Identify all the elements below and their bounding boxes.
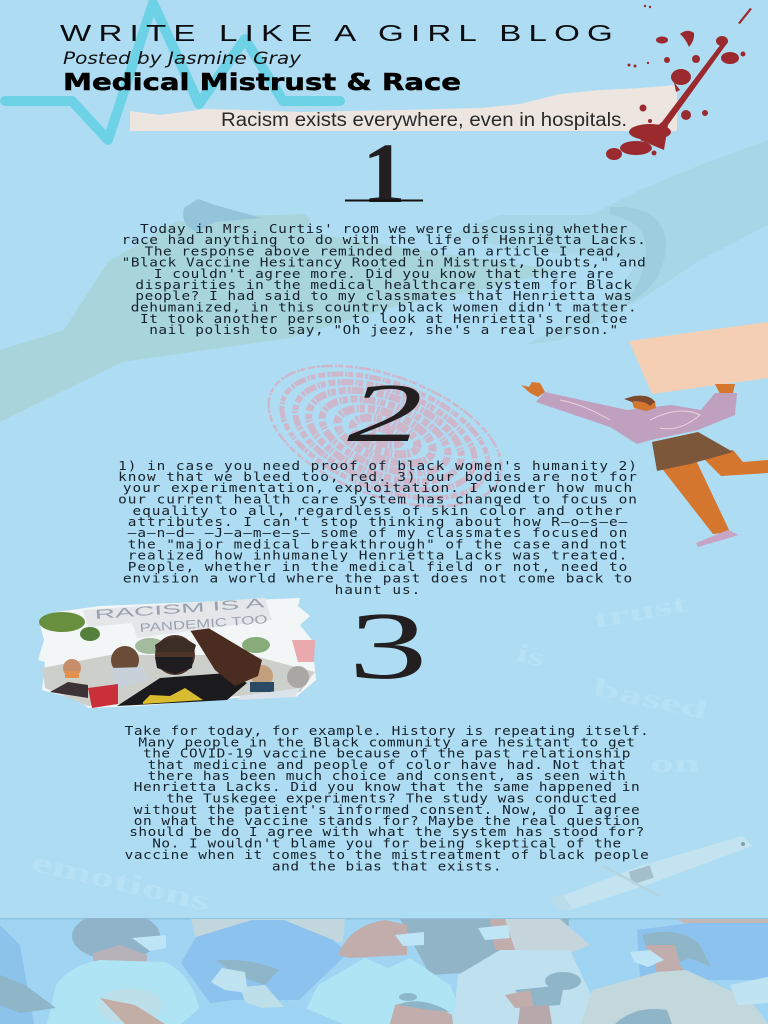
shoe bbox=[696, 530, 739, 547]
raised right hand bbox=[715, 384, 735, 394]
number 2: 2 bbox=[347, 367, 423, 460]
paragraph 3: Take for today, for example. History is repeating itself. bbox=[125, 725, 649, 739]
paragraph 2: haunt us. bbox=[335, 584, 421, 598]
crowd illustration banner bbox=[0, 912, 768, 1024]
main protester bbox=[117, 626, 262, 706]
crowd and background bbox=[42, 655, 315, 706]
paragraph 3: without the patient's informed consent. Now, do I agree bbox=[134, 804, 640, 818]
blog title: WRITE LIKE A GIRL BLOG bbox=[60, 20, 620, 46]
trees bbox=[39, 612, 85, 632]
paragraph 3: and the bias that exists. bbox=[272, 861, 502, 874]
number 3: 3 bbox=[348, 593, 428, 699]
paragraph 3 bbox=[125, 725, 649, 874]
paragraph 2: realized how inhumanely Henrietta Lacks was treated. bbox=[128, 550, 628, 563]
watermark words: emotions bbox=[28, 847, 213, 918]
paragraph 3: that medicine and people of color have had. Not that bbox=[148, 759, 626, 773]
watermark words: based bbox=[591, 673, 711, 725]
background illustration: left gloved hand bbox=[0, 199, 560, 422]
paragraph 2: attributes. I can't stop thinking about how R—o—s—e— bbox=[128, 516, 628, 530]
icon: blood splatter bbox=[606, 5, 752, 160]
paragraph 1: dehumanized, in this country black women didn't matter. bbox=[131, 302, 637, 315]
watermark words: on bbox=[650, 749, 701, 778]
tagline: Racism exists everywhere, even in hospitals. bbox=[221, 110, 627, 131]
paragraph 2: the "major medical breakthrough" of the case and not bbox=[128, 539, 628, 552]
paragraph 1: The response above reminded me of an article I read, bbox=[145, 246, 623, 259]
heartbeat line bbox=[5, 3, 340, 140]
paragraph 3: the Tuskegee experiments? The study was conducted bbox=[166, 793, 617, 806]
torn paper strip bbox=[130, 85, 677, 131]
side protester left bbox=[50, 659, 88, 698]
hair bbox=[624, 396, 655, 406]
figure: small bun head bottom centre bbox=[390, 993, 453, 1024]
paragraph 1: I couldn't agree more. Did you know that there are bbox=[154, 268, 614, 282]
paragraph 3: No. I wouldn't blame you for being skeptical of the bbox=[152, 838, 622, 851]
back figures: grey and slate shoulders bbox=[191, 919, 345, 942]
figure: long hair, centre bbox=[306, 920, 456, 1024]
watermark words: trust bbox=[591, 589, 690, 634]
paragraph 1: "Black Vaccine Hesitancy Rooted in Mistrust, Doubts," and bbox=[122, 257, 646, 270]
paragraph 3: there has been much choice and consent, as seen with bbox=[148, 770, 626, 784]
paragraph 1: Today in Mrs. Curtis' room we were discussing whether bbox=[140, 223, 628, 237]
raised left hand bbox=[521, 382, 545, 397]
sweater pattern bbox=[560, 400, 700, 429]
head bbox=[632, 401, 656, 411]
fingerprint bbox=[250, 338, 520, 534]
paragraph 2: envision a world where the past does not come back to bbox=[123, 573, 633, 586]
sweater bbox=[536, 392, 737, 444]
paragraph 3: vaccine when it comes to the mistreatment of black people bbox=[125, 849, 649, 863]
protest sign bbox=[83, 595, 272, 638]
figure: blonde with mask bbox=[453, 919, 605, 1024]
protest sign: RACISM IS A bbox=[94, 595, 265, 622]
icon: syringe bbox=[550, 836, 752, 911]
paragraph 2: equality to all, regardless of skin color and other bbox=[133, 505, 623, 519]
right leg bbox=[700, 450, 768, 476]
paragraph 3: on what the vaccine stands for? Maybe the real question bbox=[134, 815, 640, 829]
paragraph 2: know that we bleed too, red. 3) our bodies are not for bbox=[118, 471, 638, 485]
figure: left edge dark hair bbox=[0, 975, 56, 1013]
side protester with bandana bbox=[88, 646, 148, 708]
paragraph 2: 1) in case you need proof of black women's humanity 2) bbox=[118, 460, 638, 474]
paragraph 1: people? I had said to my classmates that Henrietta was bbox=[135, 290, 633, 304]
number 1: 1 bbox=[362, 125, 406, 221]
left leg bbox=[660, 458, 730, 534]
paragraph 3: the COVID-19 vaccine because of the past relationship bbox=[143, 748, 631, 761]
paragraph 2: —a—n—d— —J—a—m—e—s— some of my classmates focused on bbox=[128, 527, 628, 541]
paragraph 2 bbox=[118, 460, 638, 598]
figure: left edge blue bbox=[0, 925, 34, 1024]
figure: short hair centre front bbox=[181, 960, 343, 1024]
photo: protester with sign bbox=[38, 595, 316, 708]
author line: Posted by Jasmine Gray bbox=[63, 49, 302, 69]
figure: bun woman bbox=[505, 972, 581, 1024]
side protester right bbox=[238, 665, 309, 700]
figure: curly hair with mask bbox=[47, 912, 203, 1024]
paragraph 1: nail polish to say, "Oh jeez, she's a real person." bbox=[149, 324, 619, 338]
figure: person holding a sign bbox=[521, 322, 768, 547]
photo brush-edge background bbox=[38, 598, 316, 708]
paragraph 2: People, whether in the medical field or not, need to bbox=[128, 561, 628, 575]
watermark words bbox=[28, 589, 711, 918]
paragraph 3: Many people in the Black community are hesitant to get bbox=[138, 737, 636, 750]
background illustration: right gloved hand bbox=[450, 140, 768, 345]
paragraph 1: It took another person to look at Henrietta's red toe bbox=[140, 313, 628, 327]
paragraph 1: race had anything to do with the life of Henrietta Lacks. bbox=[122, 234, 646, 248]
protest sign: PANDEMIC TOO bbox=[139, 612, 268, 635]
paragraph 3: should be do I agree with what the system has stood for? bbox=[129, 826, 645, 840]
figure: mask profile right bbox=[581, 932, 768, 1024]
headline: Medical Mistrust & Race bbox=[63, 70, 461, 96]
paragraph 2: our current health care system has changed to focus on bbox=[118, 494, 638, 507]
watermark words: is bbox=[513, 638, 548, 673]
figure: blue sweater bbox=[181, 920, 348, 1003]
sign board bbox=[629, 322, 768, 394]
number 1 bbox=[345, 125, 423, 221]
paragraph 1: disparities in the medical healthcare system for Black bbox=[135, 279, 633, 293]
paragraph 1 bbox=[122, 223, 646, 338]
paragraph 2: your experimentation, exploitation. I wonder how much bbox=[123, 482, 633, 496]
paragraph 3: Henrietta Lacks. Did you know that the same happened in bbox=[134, 781, 640, 795]
shorts bbox=[652, 432, 733, 471]
